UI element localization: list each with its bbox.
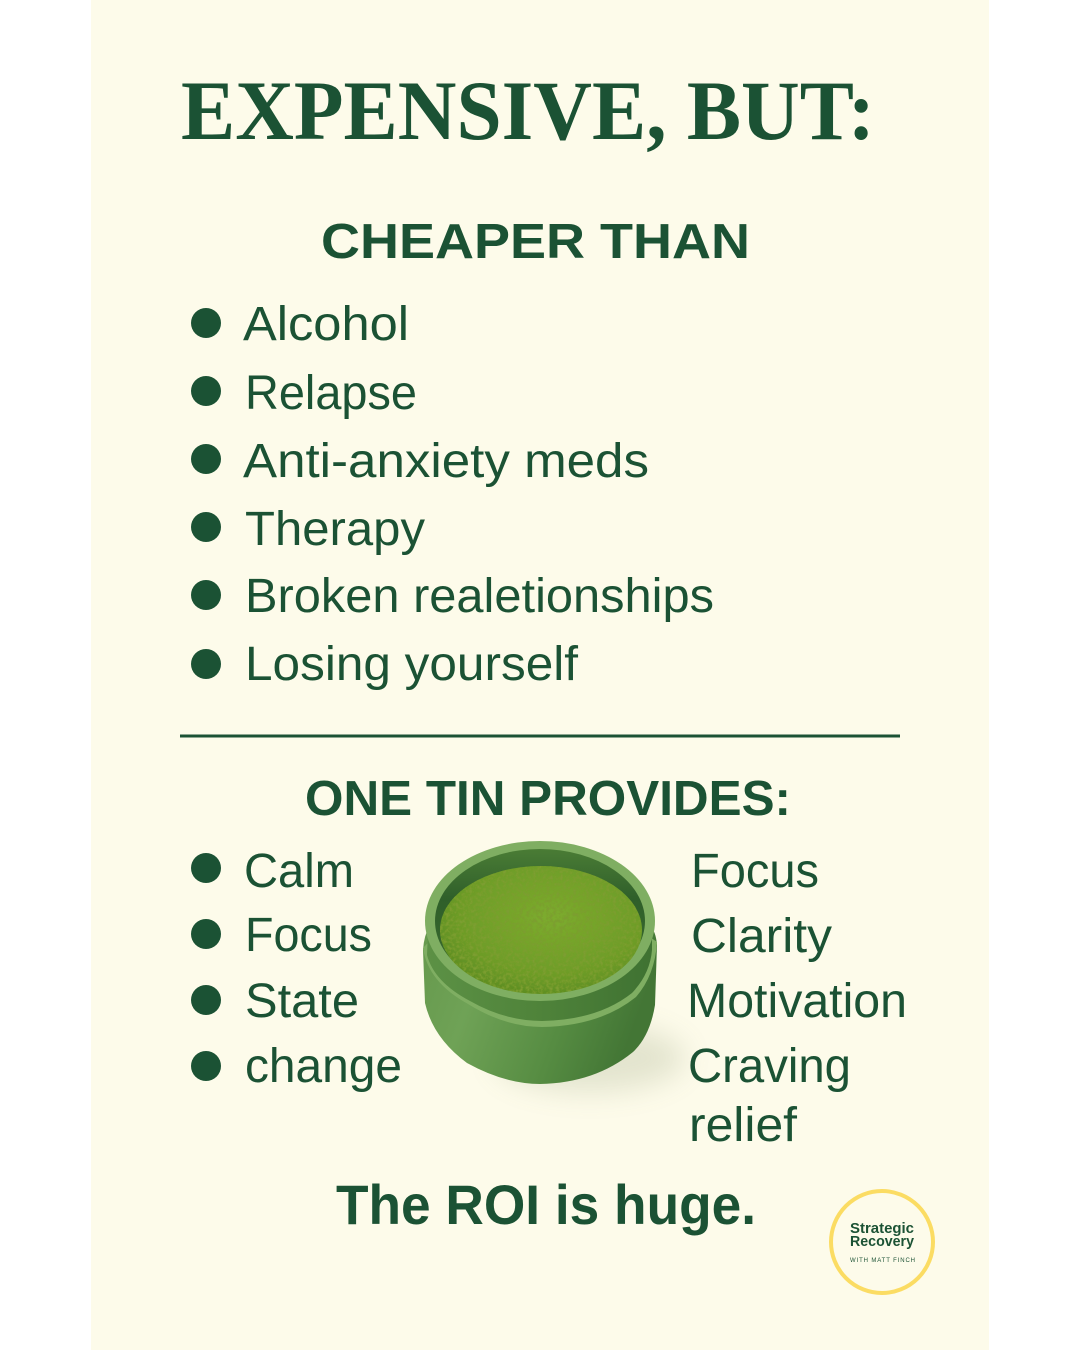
title: EXPENSIVE, BUT: xyxy=(181,64,875,158)
logo badge: Recovery xyxy=(850,1234,914,1250)
list: right benefits xyxy=(687,845,907,1152)
logo badge: Strategic xyxy=(850,1221,914,1237)
heading: one tin provides: ONE TIN PROVIDES: xyxy=(305,772,791,826)
list item: state xyxy=(191,975,359,1028)
list item: craving relief: relief xyxy=(689,1099,798,1152)
list item: state: State xyxy=(245,975,359,1028)
list item: broken relationships: Broken realetionships xyxy=(245,570,714,623)
list item: losing yourself: Losing yourself xyxy=(245,638,579,691)
list: left benefits xyxy=(191,845,402,1093)
list item: anti-anxiety meds: Anti-anxiety meds xyxy=(243,435,649,488)
list item: craving relief: Craving xyxy=(688,1040,851,1093)
heading: cheaper than: CHEAPER THAN xyxy=(321,215,750,269)
list item: calm xyxy=(191,845,354,898)
list item: therapy: Therapy xyxy=(245,503,425,556)
list item: change: change xyxy=(245,1040,402,1093)
logo badge xyxy=(831,1191,933,1293)
list item: clarity: Clarity xyxy=(691,910,832,963)
list: cheaper than items xyxy=(191,298,714,691)
list item: alcohol: Alcohol xyxy=(243,298,409,351)
list item: relapse: Relapse xyxy=(245,367,417,420)
list item: motivation: Motivation xyxy=(687,975,907,1028)
list item: craving relief xyxy=(688,1040,851,1152)
icon: tin of matcha powder xyxy=(423,841,685,1092)
list item: focus: Focus xyxy=(245,909,372,962)
list item: calm: Calm xyxy=(244,845,354,898)
closing statement: The ROI is huge. xyxy=(336,1173,756,1236)
list item: focus xyxy=(191,909,372,962)
logo badge: WITH MATT FINCH xyxy=(850,1258,915,1264)
list item: focus: Focus xyxy=(691,845,819,898)
